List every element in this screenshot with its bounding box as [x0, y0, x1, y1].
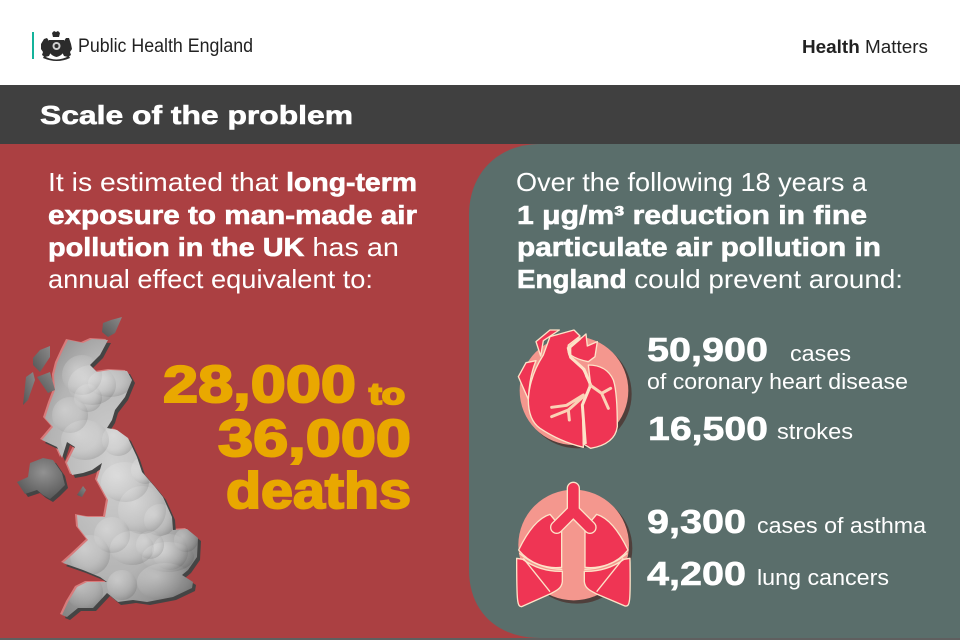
deaths figure: to [369, 378, 405, 411]
map of the UK [17, 317, 201, 620]
intro text: It is estimated that long-term [48, 167, 417, 197]
prevention text: 1 μg/m³ reduction in fine [517, 202, 867, 230]
stat: asthma: 9,300 [647, 503, 746, 540]
deaths figure: 36,000 [218, 410, 411, 468]
deaths figure [163, 356, 411, 519]
stat: strokes [648, 410, 853, 447]
stat: lung cancers: 4,200 [647, 555, 746, 592]
stat: coronary heart disease: of coronary heart disease [647, 369, 908, 394]
panel: UK estimate [0, 144, 960, 640]
title: Scale of the problem [40, 100, 353, 130]
icon: royal crest [41, 31, 72, 61]
deaths figure: deaths [226, 462, 411, 519]
icon: heart [518, 330, 632, 448]
stat: asthma [647, 503, 927, 540]
prevention text: Over the following 18 years a [516, 167, 868, 197]
header band [0, 0, 960, 85]
stat: lung cancers: lung cancers [757, 565, 889, 590]
stat: strokes: 16,500 [648, 410, 768, 447]
stat: coronary heart disease: 50,900 [647, 331, 768, 368]
intro text [48, 167, 417, 294]
stat: strokes: strokes [777, 419, 853, 444]
panel: England prevention [469, 144, 960, 638]
icon: lungs [517, 488, 632, 607]
Health Matters label: Health Matters [802, 37, 928, 57]
logo: Public Health England [32, 31, 253, 61]
intro text: pollution in the UK has an [48, 232, 399, 262]
stat: asthma: cases of asthma [757, 513, 927, 538]
prevention text [516, 167, 903, 294]
stat: coronary heart disease [647, 331, 908, 394]
intro text: exposure to man-made air [48, 202, 417, 230]
deaths figure: 28,000 [163, 356, 356, 414]
prevention text: particulate air pollution in [517, 234, 881, 262]
organisation name: Public Health England [78, 36, 253, 57]
title band [0, 85, 960, 144]
stat: coronary heart disease: cases [790, 341, 851, 366]
intro text: annual effect equivalent to: [48, 264, 373, 294]
prevention text: England could prevent around: [517, 264, 903, 294]
stat: lung cancers [647, 555, 889, 592]
